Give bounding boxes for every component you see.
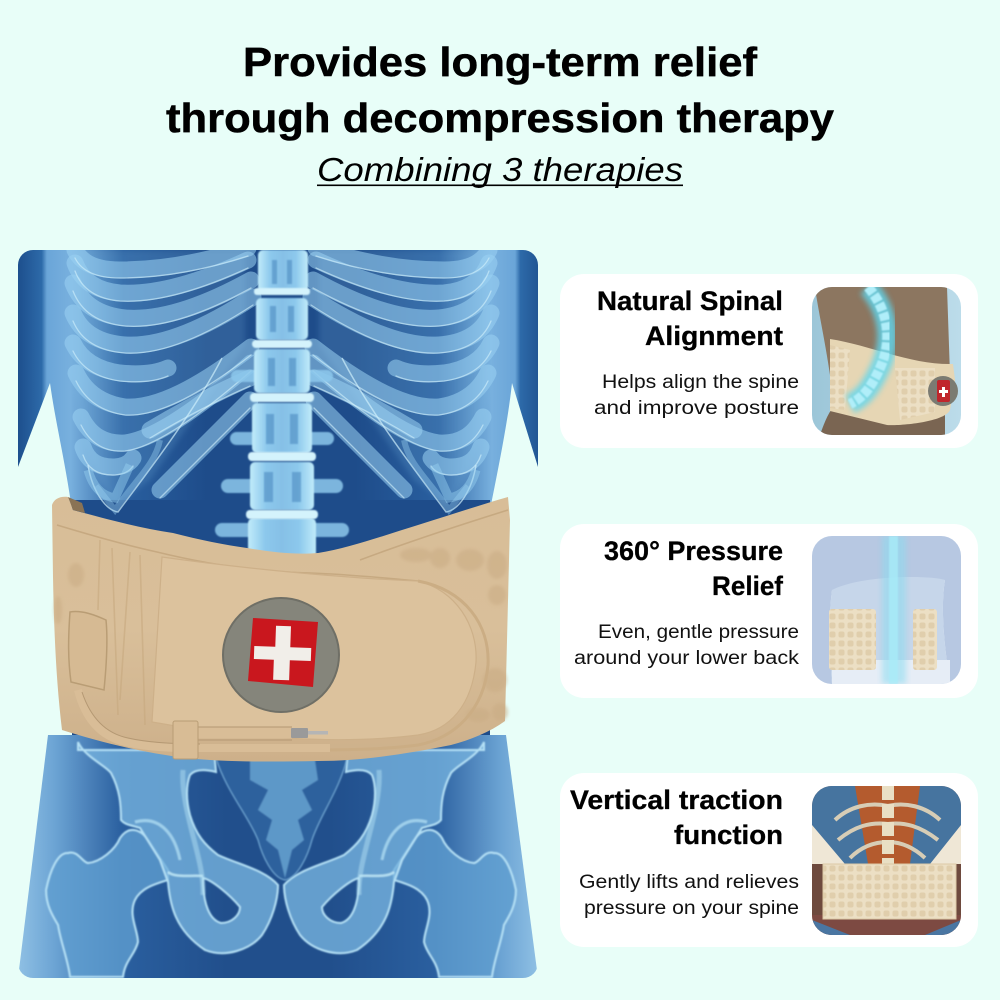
description: Gently lifts and relieves <box>579 872 799 893</box>
belt bumps <box>54 548 508 722</box>
rib cage <box>73 248 491 512</box>
description: Helps align the spine <box>602 372 799 393</box>
panel: natural spinal alignment <box>560 274 978 448</box>
heading: 360° Pressure <box>604 536 783 566</box>
image: belt with glowing spine <box>812 287 961 435</box>
panel: vertical traction <box>560 773 978 947</box>
spine <box>215 250 349 570</box>
image: spine with belt <box>812 786 961 935</box>
heading: Vertical traction <box>570 785 783 815</box>
side pocket <box>69 612 107 690</box>
heading <box>597 286 783 351</box>
description: and improve posture <box>594 398 799 419</box>
heading <box>604 536 784 601</box>
description: Even, gentle pressure <box>598 622 799 643</box>
title <box>166 39 834 141</box>
badge <box>223 598 339 712</box>
heading <box>570 785 783 850</box>
valve <box>291 728 308 738</box>
left panel stitching <box>98 540 145 725</box>
title: through decompression therapy <box>166 95 834 141</box>
velcro flap <box>152 557 476 740</box>
description <box>574 622 800 669</box>
belt rim <box>57 525 418 581</box>
description: pressure on your spine <box>584 898 799 919</box>
heading: Relief <box>712 571 784 601</box>
strap <box>173 721 198 759</box>
heading: Natural Spinal <box>597 286 783 316</box>
subtitle: Combining 3 therapies <box>317 151 683 188</box>
pelvis <box>46 742 516 977</box>
air tube <box>86 718 330 752</box>
heading: Alignment <box>645 321 783 351</box>
image: back with panels <box>812 536 961 684</box>
description <box>579 872 799 919</box>
panel: 360 pressure relief <box>560 524 978 698</box>
sacrum <box>215 755 348 880</box>
title: Provides long-term relief <box>243 39 757 85</box>
heading: function <box>674 820 783 850</box>
description <box>594 372 799 419</box>
belt <box>52 497 510 762</box>
description: around your lower back <box>574 648 800 669</box>
panel: anatomy with belt <box>18 248 538 978</box>
body silhouette <box>18 250 538 978</box>
